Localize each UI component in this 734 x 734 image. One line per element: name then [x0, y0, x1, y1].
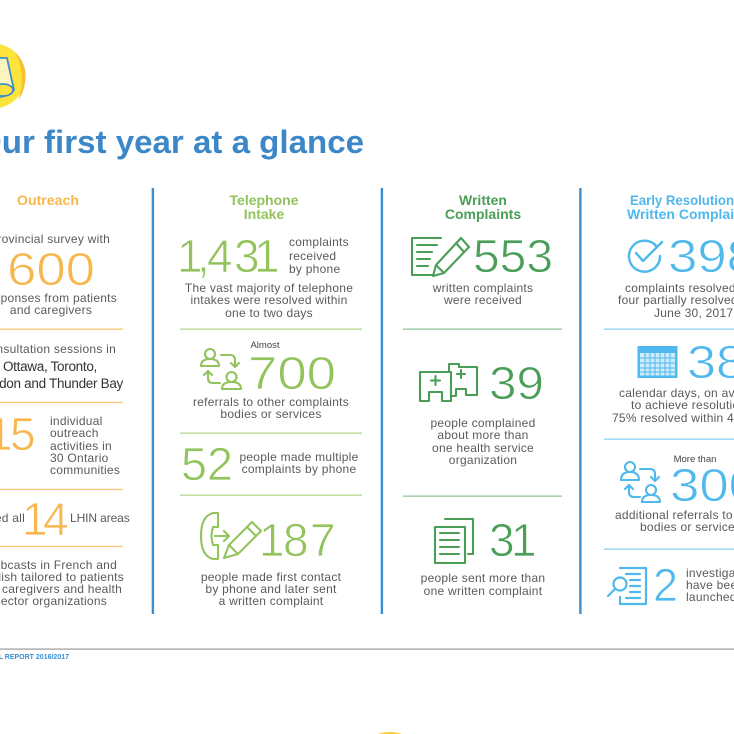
text: multiple complaints	[239, 450, 359, 476]
text: LHIN areas: LHIN areas	[70, 511, 130, 525]
panel: early resolution	[604, 192, 734, 611]
number: 1,431: 1,431	[177, 230, 280, 282]
heading: telephone intake	[230, 192, 299, 222]
heading: written complaints: Complaints	[445, 206, 521, 222]
number: 553: 553	[473, 230, 553, 282]
text: first contact: a written complaint	[219, 594, 324, 608]
icon: health buildings	[420, 364, 477, 401]
text: investigations	[686, 566, 734, 604]
icon: stacked documents	[435, 519, 473, 563]
text: referrals	[193, 395, 349, 421]
text: complaints received: by phone	[289, 262, 340, 276]
number: 2: 2	[653, 559, 678, 611]
panel: written complaints	[403, 192, 562, 598]
heading: written complaints: Written	[459, 192, 507, 208]
text: more than: More than	[674, 454, 716, 465]
text: outreach activities: 30 Ontario	[50, 451, 109, 465]
icon: phone and pencil	[201, 513, 261, 559]
icon: next page badge	[368, 732, 412, 734]
text: vast majority: intakes were resolved within	[190, 293, 348, 307]
text: multiple complaints: people made multiple	[239, 450, 359, 464]
text: multiple complaints: complaints by phone	[242, 462, 356, 476]
icon: referrals	[201, 349, 241, 389]
text: complaints received: complaints	[289, 235, 349, 249]
text: more than one organization: organization	[449, 453, 517, 467]
text: outreach activities: communities	[50, 463, 120, 477]
text: responses	[0, 291, 117, 317]
text: complaints received: received	[289, 249, 336, 263]
icon: document and pencil	[412, 238, 469, 276]
heading: early resolution	[627, 192, 734, 222]
heading: telephone intake: Intake	[244, 206, 284, 222]
text: more than one organization: about more than	[437, 428, 529, 442]
heading: written complaints	[445, 192, 521, 222]
text: complaints resolved	[618, 281, 734, 320]
icon: calendar	[638, 346, 678, 378]
text: almost: Almost	[250, 340, 280, 351]
text: consultation sessions	[0, 342, 124, 391]
text: more than one written complaint: one written complaint	[424, 584, 543, 598]
text: written complaints received: were received	[443, 293, 522, 307]
icon: referrals blue	[621, 462, 660, 502]
text: calendar days	[612, 386, 734, 425]
icon: megaphone badge	[0, 44, 26, 108]
text: complaints resolved: June 30, 2017	[654, 306, 733, 320]
number: 600: 600	[7, 243, 95, 295]
text: outreach activities	[50, 414, 120, 477]
number: 700: 700	[248, 347, 336, 399]
text: vast majority: The vast majority of telephone	[185, 281, 353, 295]
text: written complaints received	[432, 281, 533, 307]
text: referrals: bodies or services	[220, 407, 322, 421]
panel: telephone intake	[177, 192, 362, 608]
text: responses: and caregivers	[10, 303, 92, 317]
panel: outreach	[0, 192, 130, 608]
text: more than one organization: one health service	[432, 441, 534, 455]
heading: telephone intake: Telephone	[230, 192, 299, 208]
heading: outreach: Outreach	[17, 192, 79, 208]
text: first contact: people made first contact	[201, 570, 342, 584]
text: more than one written complaint	[421, 571, 545, 598]
number: 14: 14	[22, 493, 69, 545]
text: additional referrals	[615, 508, 734, 534]
text: vast majority	[185, 281, 353, 320]
number: 52: 52	[181, 438, 233, 490]
text: outreach activities: outreach	[50, 426, 99, 440]
text: first contact: by phone and later sent	[205, 582, 337, 596]
text: more than one organization	[430, 416, 536, 467]
number: 187: 187	[259, 514, 336, 566]
icon: magnifier document	[608, 568, 646, 604]
text: webcasts	[0, 558, 124, 608]
text: vast majority: one to two days	[225, 306, 313, 320]
text: written complaints received: written complaints	[432, 281, 533, 295]
text: referrals: referrals to other complaints	[193, 395, 349, 409]
text: more than one organization: people complained	[430, 416, 536, 430]
text: first contact	[201, 570, 342, 608]
icon: check circle	[629, 241, 662, 272]
number: 39: 39	[489, 357, 544, 409]
text: outreach activities: individual	[50, 414, 103, 428]
text: outreach activities: activities in	[50, 439, 112, 453]
text: complaints received	[289, 235, 349, 276]
number: 31: 31	[489, 514, 537, 566]
text: more than one written complaint: people sent more than	[421, 571, 545, 585]
